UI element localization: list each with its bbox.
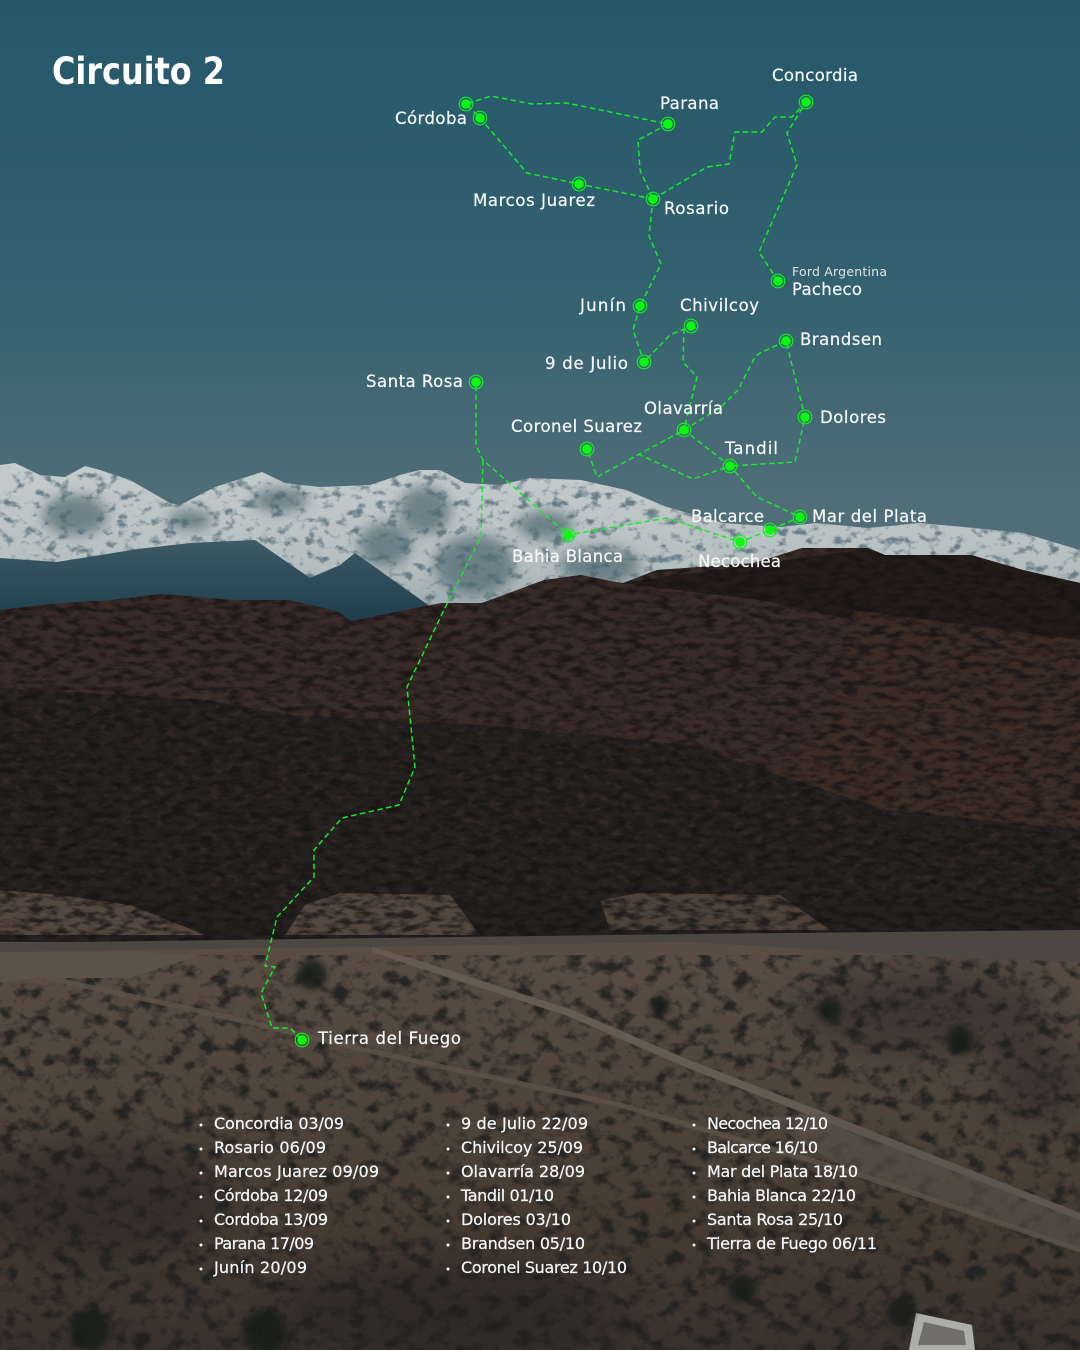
- marker: Balcarce: [763, 523, 777, 537]
- marker: Rosario: [646, 192, 660, 206]
- background: sky: [0, 0, 1080, 640]
- schedule list: column 3: Tierra de Fuego 06/11: [706, 1234, 877, 1253]
- background: foreground plain: [0, 942, 1080, 1350]
- schedule list: column 3: Mar del Plata 18/10: [707, 1162, 858, 1181]
- city labels: Balcarce: [691, 507, 764, 526]
- background: roads: [0, 930, 1080, 1250]
- marker: Coronel Suarez: [580, 442, 594, 456]
- marker: Necochea: [733, 535, 747, 549]
- title: Circuito 2: [52, 50, 225, 93]
- schedule list: column 2: Chivilcoy 25/09: [461, 1138, 583, 1157]
- city labels: Ford Argentina: [792, 264, 887, 279]
- city labels: Dolores: [820, 408, 886, 427]
- schedule list: column 2: Olavarría 28/09: [461, 1162, 585, 1181]
- background: snowy mountains: [0, 463, 1080, 606]
- schedule list: column 2: Coronel Suarez 10/10: [461, 1258, 627, 1277]
- schedule list: column 3: Necochea 12/10: [707, 1114, 828, 1133]
- schedule list: column 1: Concordia 03/09: [214, 1114, 344, 1133]
- schedule list: column 1: Rosario 06/09: [214, 1138, 326, 1157]
- marker: Tierra del Fuego: [295, 1033, 309, 1047]
- city labels: Necochea: [698, 552, 781, 571]
- background: blue foothills: [0, 540, 431, 625]
- city labels: Córdoba: [395, 109, 467, 128]
- city labels: Olavarría: [644, 399, 723, 418]
- city labels: Concordia: [772, 66, 858, 85]
- city labels: Parana: [660, 94, 719, 113]
- marker: Tandil: [723, 459, 737, 473]
- marker: Córdoba arrival: [459, 97, 473, 111]
- marker: Bahia Blanca: [561, 528, 575, 542]
- marker: Junín: [633, 299, 647, 313]
- marker: Pacheco: [771, 274, 785, 288]
- schedule list: column 2: Brandsen 05/10: [461, 1234, 585, 1253]
- city labels: Pacheco: [792, 280, 862, 299]
- city labels: 9 de Julio: [545, 354, 628, 373]
- schedule list: column 3: Balcarce 16/10: [707, 1138, 818, 1157]
- schedule list: column 1: Córdoba 12/09: [214, 1186, 328, 1205]
- marker: Mar del Plata: [793, 510, 807, 524]
- background: dark shrubs: [70, 960, 974, 1350]
- schedule list: column 1: [200, 1114, 379, 1277]
- marker: Concordia: [799, 95, 813, 109]
- city labels: Bahia Blanca: [512, 547, 623, 566]
- schedule list: column 1: Parana 17/09: [214, 1234, 314, 1253]
- marker: Parana: [661, 117, 675, 131]
- schedule list: column 3: Bahia Blanca 22/10: [707, 1186, 856, 1205]
- marker: Santa Rosa: [469, 375, 483, 389]
- schedule list: column 3: Santa Rosa 25/10: [707, 1210, 843, 1229]
- marker: Córdoba: [473, 111, 487, 125]
- marker: Dolores: [798, 410, 812, 424]
- city labels: [317, 66, 927, 1048]
- icon: building at the bottom edge: [909, 1313, 975, 1350]
- city labels: Tierra del Fuego: [317, 1029, 461, 1048]
- schedule list: column 1: Cordoba 13/09: [214, 1210, 328, 1229]
- background: red rock ridge: [0, 540, 1080, 950]
- city labels: Junín: [579, 296, 626, 315]
- schedule list: column 1: Marcos Juarez 09/09: [214, 1162, 379, 1181]
- marker: Marcos Juarez: [572, 177, 586, 191]
- city labels: Marcos Juarez: [473, 191, 595, 210]
- route: dashed line: [261, 96, 806, 1040]
- background: foreground shrubs: [0, 955, 1080, 1350]
- city labels: Mar del Plata: [812, 507, 927, 526]
- city labels: Tandil: [724, 439, 778, 458]
- schedule list: column 1: Junín 20/09: [213, 1258, 307, 1277]
- city labels: Rosario: [664, 199, 729, 218]
- marker: Chivilcoy: [684, 319, 698, 333]
- background: foreground dark zones: [0, 966, 1080, 1350]
- marker: Brandsen: [779, 334, 793, 348]
- city labels: Coronel Suarez: [511, 417, 642, 436]
- schedule list: column 2: 9 de Julio 22/09: [461, 1114, 588, 1133]
- schedule list: column 2: [446, 1114, 627, 1277]
- city labels: Brandsen: [800, 330, 882, 349]
- schedule list: column 2: Tandil 01/10: [460, 1186, 554, 1205]
- route map: [261, 66, 927, 1048]
- city labels: Santa Rosa: [366, 372, 463, 391]
- schedule list: column 3: [692, 1114, 877, 1253]
- city labels: Chivilcoy: [680, 296, 759, 315]
- marker: Olavarría: [677, 423, 691, 437]
- marker: 9 de Julio: [637, 355, 651, 369]
- schedule list: column 2: Dolores 03/10: [461, 1210, 571, 1229]
